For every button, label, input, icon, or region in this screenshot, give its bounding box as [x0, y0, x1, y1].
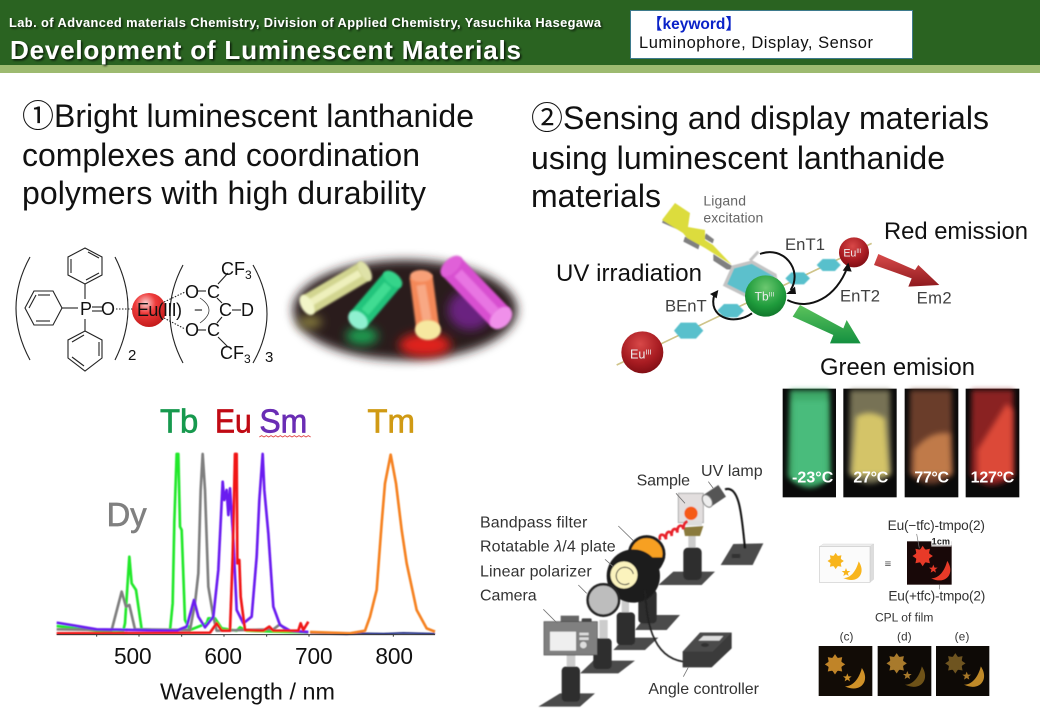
atom labels: − — [194, 302, 203, 319]
lanthanide spheres: III — [645, 347, 652, 356]
axis tick labels and title: 700 — [295, 643, 333, 669]
lanthanide spheres: Eu — [843, 248, 856, 260]
element labels: Dy — [107, 497, 147, 534]
film captions: CPL of film — [875, 611, 933, 625]
diagram small labels: Em2 — [917, 288, 952, 307]
lanthanide spheres — [621, 237, 869, 373]
axis tick labels and title: 600 — [204, 643, 242, 669]
lanthanide spheres: Tb — [755, 290, 769, 304]
equivalent sign: ≡ — [885, 558, 892, 570]
keyword box: Luminophore, Display, Sensor — [639, 34, 874, 52]
label: UV irradiation: UV irradiation — [556, 260, 702, 287]
optical discs — [588, 537, 664, 616]
heading 2: sensing and display: materials — [531, 178, 661, 214]
curve arrowheads — [710, 263, 852, 298]
lanthanide spheres: III — [856, 249, 862, 255]
diagram small labels: EnT1 — [785, 235, 825, 254]
tube photo: -23C — [783, 389, 836, 497]
film captions: Eu(−tfc)-tmpo(2) — [888, 518, 985, 533]
emission spectrum chart — [57, 404, 435, 704]
x axis — [57, 635, 435, 637]
tube photo: 27C — [843, 389, 897, 497]
spell-check underline — [259, 436, 311, 437]
keyword box: 【keyword】 — [647, 16, 741, 33]
label: red emission: Red emission — [884, 218, 1028, 245]
base plates — [538, 543, 763, 707]
axis tick labels and title: Wavelength / nm — [160, 678, 335, 704]
apparatus labels: Rotatable λ/4 plate — [480, 538, 616, 555]
label: green emission: Green emision — [820, 354, 975, 381]
lanthanide spheres: III — [769, 292, 774, 299]
axis tick labels and title — [114, 643, 413, 704]
atom labels: C — [207, 320, 220, 340]
tube photo: 77C — [905, 389, 958, 497]
film captions: (e) — [955, 631, 969, 644]
main title: Development of Luminescent Materials — [10, 35, 521, 65]
heading 1: bright lanthanide complexes: complexes and coordination — [22, 137, 420, 173]
chemical structure of Eu(III) complex — [16, 248, 273, 371]
apparatus labels — [480, 463, 763, 698]
atom labels — [80, 259, 273, 366]
atom labels: O — [185, 282, 199, 302]
emission arrows — [793, 254, 939, 343]
film captions: (d) — [897, 631, 912, 644]
keyword box — [630, 10, 912, 58]
ligand hexagon — [725, 252, 778, 295]
small linker hexagons — [674, 259, 841, 339]
rod glow reflections — [298, 290, 492, 357]
axis tick labels and title: 500 — [114, 643, 152, 669]
atom labels: 2 — [128, 347, 136, 364]
lab affiliation line: Lab. of Advanced materials Chemistry, Division of Applied Chemistry, Yasuchika Hasegawa — [9, 15, 602, 30]
rods — [307, 266, 501, 330]
linker line — [617, 243, 872, 365]
camera — [544, 616, 597, 655]
photo: four glowing rods — [293, 252, 517, 360]
tube photo: 27C: 27°C — [853, 470, 889, 487]
heading 1: bright lanthanide complexes — [22, 98, 474, 211]
phenyl rings — [25, 248, 102, 371]
atom labels: C — [219, 300, 232, 320]
atom labels: O — [101, 299, 115, 319]
heading 1: bright lanthanide complexes: polymers with high durability — [22, 175, 426, 211]
film captions: (c) — [840, 631, 853, 644]
tube photo: 127C: 127°C — [971, 470, 1015, 487]
heading 1: bright lanthanide complexes: ①Bright luminescent lanthanide — [22, 98, 474, 134]
heading 2: sensing and display: using luminescent lanthanide — [531, 140, 945, 176]
CPL photo e — [936, 646, 989, 696]
atom labels: 3 — [244, 352, 251, 366]
element labels — [107, 404, 415, 534]
atom labels: O — [185, 320, 199, 340]
spectrum traces — [57, 454, 435, 634]
CPL photo d — [878, 646, 931, 696]
atom labels: C — [207, 282, 220, 302]
red emissive film photo — [907, 534, 952, 589]
apparatus labels: Sample — [637, 473, 690, 490]
diagram small labels — [665, 192, 952, 316]
film captions — [840, 518, 985, 644]
tube photo: -23C: -23°C — [792, 470, 834, 487]
atom labels: P — [80, 299, 92, 319]
leader lines — [543, 482, 713, 677]
heading 2: sensing and display: ②Sensing and display materials — [531, 100, 989, 136]
UV lamp — [700, 485, 745, 558]
lanthanide spheres: Eu — [630, 348, 645, 362]
tube photo: 77C: 77°C — [914, 470, 949, 487]
CPL measurement apparatus — [480, 463, 763, 707]
atom labels: Eu(III) — [137, 300, 182, 320]
element labels: Tm — [367, 404, 415, 441]
red emissive film photo: 1cm — [932, 537, 950, 547]
element labels: Tb — [160, 404, 198, 441]
apparatus labels: Bandpass filter — [480, 514, 588, 531]
film illustration — [819, 544, 874, 582]
atom labels: 3 — [265, 349, 273, 366]
apparatus labels: Angle controller — [648, 681, 760, 698]
atom labels: 3 — [245, 268, 252, 282]
apparatus labels: Camera — [480, 588, 537, 605]
film captions: Eu(+tfc)-tmpo(2) — [888, 589, 985, 604]
lightning bolt — [662, 203, 738, 270]
posts — [562, 535, 702, 702]
diagram small labels: BEnT — [665, 297, 707, 316]
rod end caps — [296, 252, 517, 340]
temperature tube photos and CPL film panel — [783, 389, 1019, 696]
bonds — [92, 273, 241, 347]
header banner — [0, 0, 1040, 73]
atom labels: D — [241, 300, 254, 320]
axis tick labels and title: 800 — [375, 643, 413, 669]
energy transfer diagram — [617, 192, 952, 373]
energy transfer curves — [713, 252, 847, 319]
element labels: Eu — [215, 404, 252, 441]
tube photo: 127C — [966, 389, 1019, 497]
sample holder — [678, 493, 703, 536]
CPL photo c — [819, 646, 872, 696]
apparatus labels: Linear polarizer — [480, 564, 592, 581]
diagram small labels: Ligand — [703, 192, 746, 208]
heading 2: sensing and display — [531, 100, 989, 214]
diagram small labels: excitation — [703, 210, 763, 226]
atom labels: CF — [220, 343, 244, 363]
diagram small labels: EnT2 — [840, 287, 880, 306]
emitted light wave — [660, 521, 687, 540]
element labels: Sm — [259, 404, 307, 441]
angle controller — [645, 590, 732, 667]
Eu centre sphere — [132, 293, 166, 327]
atom labels: CF — [221, 259, 245, 279]
apparatus labels: UV lamp — [701, 463, 763, 480]
